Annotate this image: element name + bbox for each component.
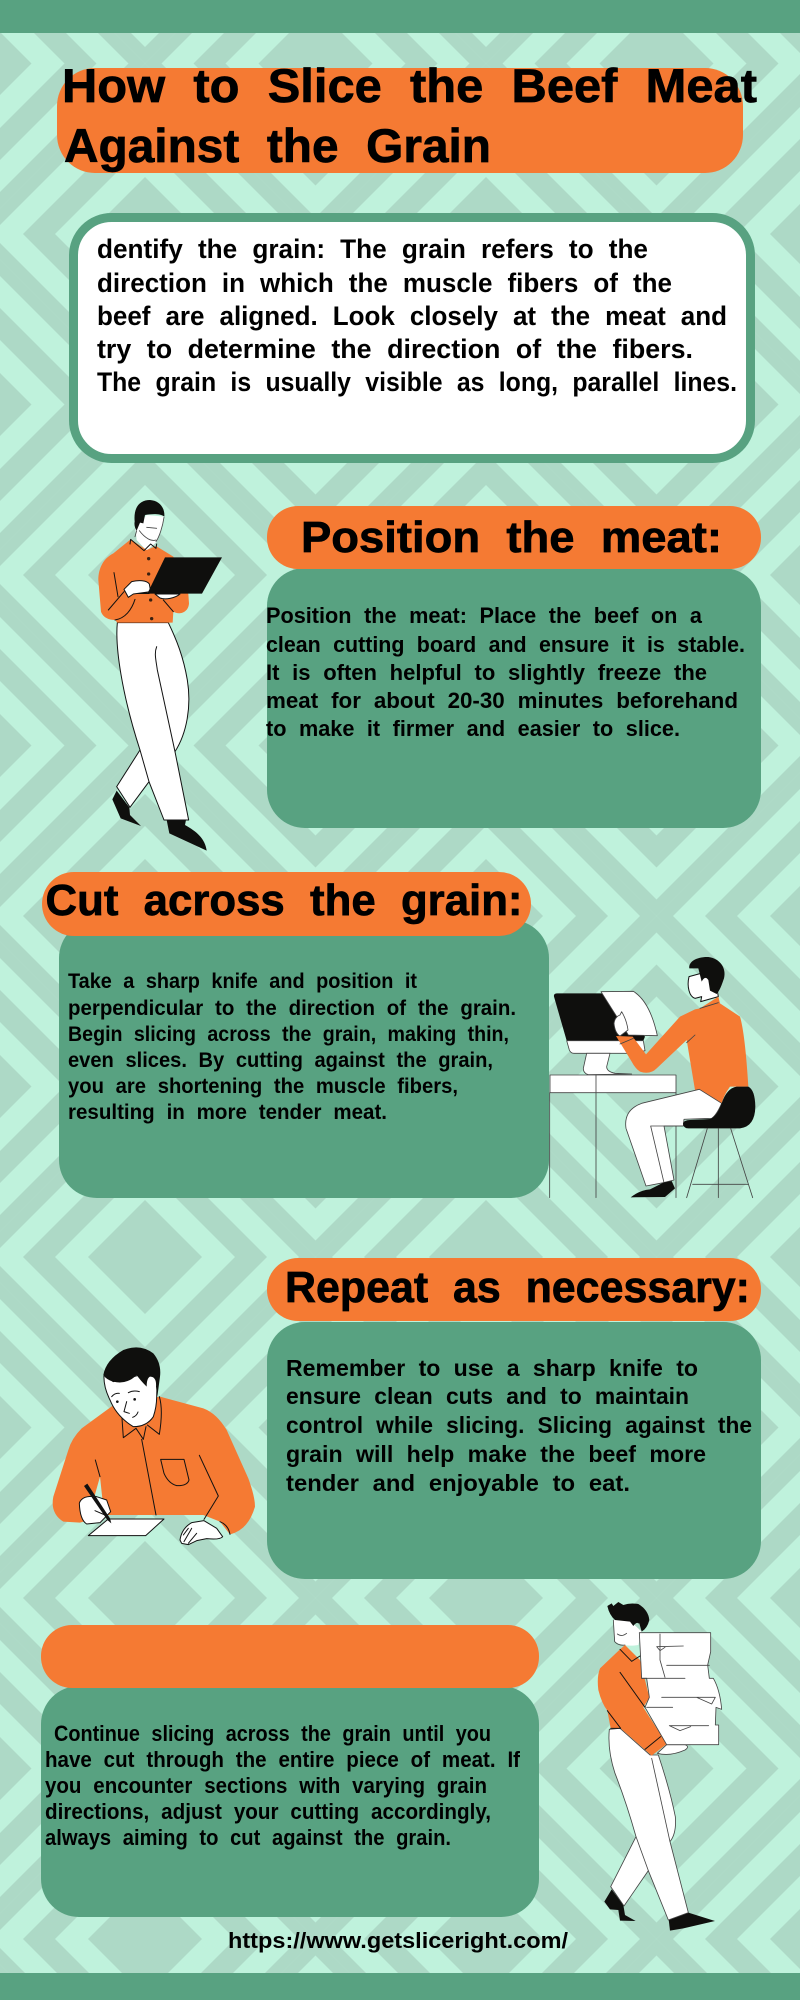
panel: repeat as necessary: Remember to use a sharp knife to — [286, 1355, 698, 1381]
top bar — [0, 0, 800, 33]
title: How to Slice the Beef Meat — [62, 59, 757, 112]
panel: identify the grain: try to determine the direction of the fibers. — [97, 334, 693, 364]
panel: continue slicing — [41, 1625, 539, 1917]
panel: cut across the grain — [42, 872, 549, 1198]
bottom bar — [0, 1973, 800, 2000]
panel: continue slicing: you encounter sections with varying grain — [45, 1773, 487, 1798]
url: https://www.getsliceright.com/ — [228, 1928, 568, 1953]
panel: continue slicing: directions, adjust your cutting accordingly, — [45, 1799, 491, 1824]
panel: position the meat: meat for about 20-30 minutes beforehand — [266, 688, 738, 713]
title: Against the Grain — [64, 119, 491, 172]
panel: repeat as necessary: Repeat as necessary: — [285, 1263, 750, 1312]
panel: repeat as necessary: control while slicing. Slicing against the — [286, 1412, 752, 1438]
panel: cut across the grain: Take a sharp knife and position it — [68, 970, 417, 993]
panel: cut across the grain: you are shortening the muscle fibers, — [68, 1075, 458, 1098]
panel: continue slicing: have cut through the entire piece of meat. If — [45, 1747, 521, 1772]
panel: repeat as necessary: grain will help make the beef more — [286, 1441, 706, 1467]
illustration: man at desk — [550, 957, 755, 1198]
panel: cut across the grain: perpendicular to the direction of the grain. — [68, 997, 516, 1020]
illustration: man writing — [53, 1347, 255, 1545]
illustration: man with laptop — [98, 500, 222, 851]
panel: position the meat: Position the meat: Place the beef on a — [266, 603, 703, 628]
title — [57, 59, 757, 173]
panel: continue slicing: Continue slicing across the grain until you — [54, 1721, 491, 1746]
panel: identify the grain — [74, 218, 750, 458]
panel: position the meat: Position the meat: — [301, 513, 722, 562]
panel: identify the grain: direction in which the muscle fibers of the — [97, 268, 672, 298]
panel: cut across the grain: resulting in more tender meat. — [68, 1101, 387, 1124]
panel: continue slicing: always aiming to cut against the grain. — [45, 1825, 451, 1850]
panel: repeat as necessary — [267, 1258, 761, 1579]
panel: cut across the grain: Begin slicing across the grain, making thin, — [68, 1023, 509, 1046]
panel: position the meat: clean cutting board and ensure it is stable. — [266, 632, 745, 657]
panel: repeat as necessary: tender and enjoyable to eat. — [286, 1470, 630, 1496]
panel: position the meat: It is often helpful to slightly freeze the — [266, 660, 707, 685]
panel: identify the grain: beef are aligned. Look closely at the meat and — [97, 301, 727, 331]
panel: position the meat: to make it firmer and easier to slice. — [266, 716, 680, 741]
panel: position the meat — [266, 506, 761, 828]
panel: cut across the grain: even slices. By cutting against the grain, — [68, 1049, 493, 1072]
panel: identify the grain: The grain is usually visible as long, parallel lines. — [97, 367, 737, 397]
panel: repeat as necessary: ensure clean cuts and to maintain — [286, 1383, 689, 1409]
panel: cut across the grain: Cut across the grain: — [46, 876, 522, 925]
panel: identify the grain: dentify the grain: The grain refers to the — [97, 234, 648, 264]
illustration: man carrying boxes — [598, 1602, 722, 1931]
